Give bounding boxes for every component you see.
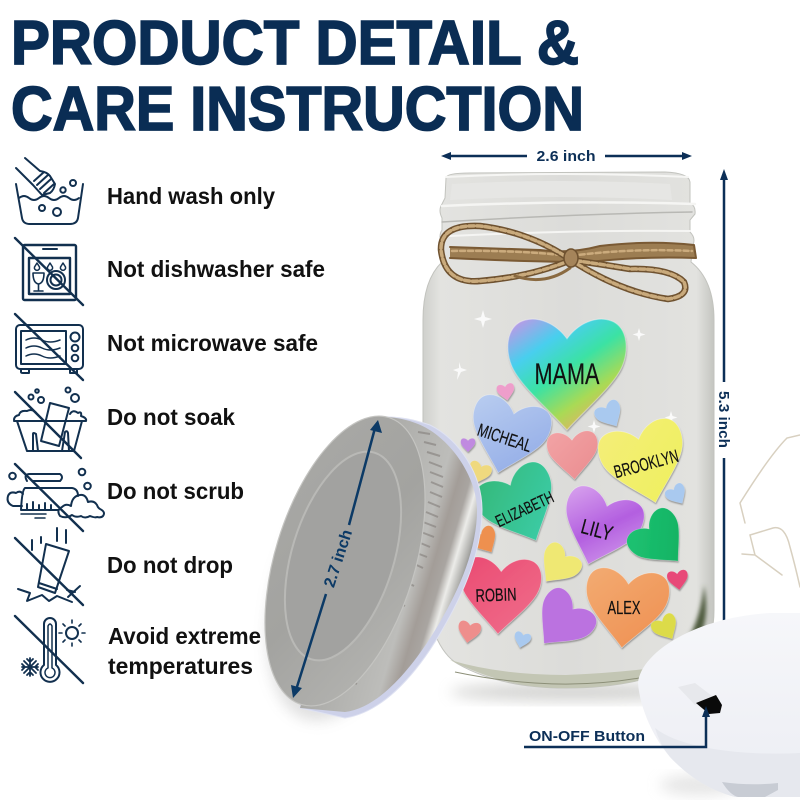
- twine bow: [441, 226, 696, 299]
- label: avoid extreme temperatures: Avoid extreme: [108, 623, 261, 649]
- on-off arrow and label: ON-OFF Button: [529, 728, 645, 745]
- heart: small hidden behind lid: [461, 438, 475, 452]
- heart names: BROOKLYN: [612, 446, 681, 482]
- heart: green: [622, 503, 699, 580]
- hearts: [456, 319, 699, 662]
- on-off button: [678, 683, 722, 714]
- jar bottom glass: [450, 585, 706, 688]
- lid shadow: [239, 440, 451, 740]
- base lower edge: [655, 728, 800, 797]
- label: avoid extreme temperatures: [108, 623, 261, 679]
- light wire: [740, 435, 800, 587]
- title: [11, 9, 584, 144]
- icon: do not soak: [14, 388, 86, 458]
- jar: [423, 172, 714, 701]
- heart names: [475, 358, 681, 618]
- dimension: jar height 5.3 inch: [715, 169, 732, 625]
- heart: tiny crimson: [666, 569, 690, 591]
- lid rim: [300, 417, 482, 718]
- battery base: [524, 613, 800, 797]
- jar body: [423, 172, 714, 688]
- label: not microwave safe: Not microwave safe: [107, 330, 318, 356]
- label: do not soak: Do not soak: [107, 404, 235, 430]
- dimension: jar height 5.3 inch: 5.3 inch: [715, 391, 732, 448]
- dimension: jar width 2.6 inch: [441, 148, 692, 165]
- dimension: jar width 2.6 inch: 2.6 inch: [536, 148, 596, 165]
- heart names: ROBIN: [475, 584, 517, 606]
- heart: tiny blue bottom: [512, 631, 532, 650]
- title: CARE INSTRUCTION: [11, 75, 584, 144]
- jar shadow: [450, 683, 700, 701]
- jar sparkles: [453, 310, 678, 433]
- title: PRODUCT DETAIL &: [11, 9, 579, 78]
- heart: MICHEAL: [460, 391, 555, 483]
- heart names: LILY: [578, 515, 615, 546]
- base body: [638, 613, 800, 797]
- heart names: ALEX: [608, 598, 640, 618]
- dimension: lid diameter 2.7 inch: [291, 420, 382, 698]
- on-off arrow and label: [524, 706, 710, 747]
- dimension: lid diameter 2.7 inch: 2.7 inch: [321, 528, 356, 590]
- lid ridges: [344, 432, 443, 684]
- icon: avoid extreme temperatures: [15, 616, 85, 683]
- heart: ALEX: [581, 566, 671, 652]
- heart: salmon: [546, 430, 600, 481]
- label: not dishwasher safe: Not dishwasher safe: [107, 256, 325, 282]
- icon: not microwave safe: [15, 314, 83, 380]
- heart names: MAMA: [534, 358, 600, 391]
- panel: care instructions: [8, 158, 325, 683]
- icon: not dishwasher safe: [15, 238, 83, 305]
- heart: small blue top: [592, 398, 628, 433]
- icon: do not drop: [15, 528, 83, 605]
- lid top face: [234, 397, 456, 725]
- heart: tiny salmon: [456, 620, 482, 645]
- heart: tiny yellow: [649, 611, 683, 645]
- icon: do not scrub: [8, 464, 104, 531]
- jar neck rims: [442, 174, 695, 236]
- lid inner ring: [263, 438, 423, 674]
- heart: LILY: [551, 482, 649, 576]
- heart: BROOKLYN: [594, 415, 697, 514]
- heart names: MICHEAL: [475, 420, 534, 456]
- icon: hand wash: [16, 158, 83, 224]
- label: do not drop: Do not drop: [107, 552, 233, 578]
- heart: MAMA: [508, 319, 626, 430]
- heart: yellow small: [530, 539, 585, 594]
- label: avoid extreme temperatures: temperatures: [108, 653, 253, 679]
- base feet: [722, 782, 778, 797]
- label: do not scrub: Do not scrub: [107, 478, 244, 504]
- heart: purple bottom: [522, 583, 601, 662]
- lid band: [300, 417, 477, 712]
- lid: [234, 397, 482, 740]
- label: hand wash: Hand wash only: [107, 183, 275, 209]
- heart names: ELIZABETH: [493, 488, 557, 531]
- base shadow: [660, 775, 740, 795]
- heart: tiny blue: [663, 481, 691, 509]
- heart: small pink: [496, 383, 516, 402]
- heart: ROBIN: [458, 556, 542, 636]
- heart: ELIZABETH: [469, 457, 572, 557]
